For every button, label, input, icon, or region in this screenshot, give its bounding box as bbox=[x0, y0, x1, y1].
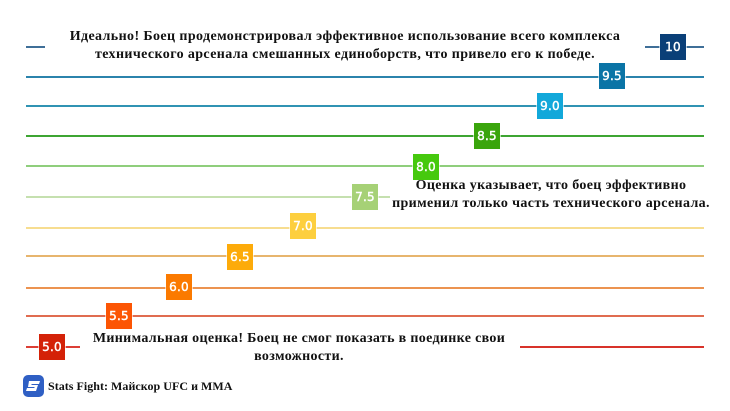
text: score 10 description: Идеально! Боец продемонстрировал эффективное использование всего комплекса bbox=[70, 29, 620, 44]
score badge 5.0 bbox=[39, 334, 65, 360]
score badge 7.0 bbox=[290, 213, 316, 239]
score badge 7.0: 7.0 bbox=[293, 219, 313, 233]
text: score 5.0 description: возможности. bbox=[254, 349, 344, 364]
score badge 5.5 bbox=[106, 303, 132, 329]
text: score 8.0 description: Оценка указывает, что боец эффективно bbox=[416, 178, 686, 193]
score badge 8.0: 8.0 bbox=[416, 160, 436, 174]
score badge 9.5 bbox=[599, 63, 625, 89]
score badge 9.5: 9.5 bbox=[602, 69, 622, 83]
text: source caption: Stats Fight: Майскор UFC и MMA bbox=[48, 379, 232, 393]
text: score 10 description bbox=[70, 29, 620, 62]
score badge 8.5 bbox=[474, 123, 500, 149]
score badge 10: 10 bbox=[665, 40, 681, 54]
score badge 5.5: 5.5 bbox=[109, 309, 129, 323]
score badge 8.5: 8.5 bbox=[477, 129, 497, 143]
text: score 8.0 description bbox=[392, 178, 710, 211]
score badge 10 bbox=[660, 34, 686, 60]
text: score 5.0 description: Минимальная оценка! Боец не смог показать в поединке свои bbox=[93, 331, 505, 346]
score badge 6.5: 6.5 bbox=[230, 250, 250, 264]
score badge 6.0: 6.0 bbox=[169, 280, 189, 294]
text: score 10 description: технического арсенала смешанных единоборств, что привело его к победе. bbox=[95, 47, 595, 62]
score badge 9.0 bbox=[537, 93, 563, 119]
score badge 5.0: 5.0 bbox=[42, 340, 62, 354]
text: score 5.0 description bbox=[93, 331, 505, 364]
score badge 8.0 bbox=[413, 154, 439, 180]
score badge 7.5 bbox=[352, 184, 378, 210]
score badge 6.0 bbox=[166, 274, 192, 300]
icon: Stats Fight logo bbox=[23, 375, 44, 397]
score badge 7.5: 7.5 bbox=[355, 190, 375, 204]
score badge 9.0: 9.0 bbox=[540, 99, 560, 113]
score badge 6.5 bbox=[227, 244, 253, 270]
text: score 8.0 description: применил только часть технического арсенала. bbox=[392, 196, 710, 211]
